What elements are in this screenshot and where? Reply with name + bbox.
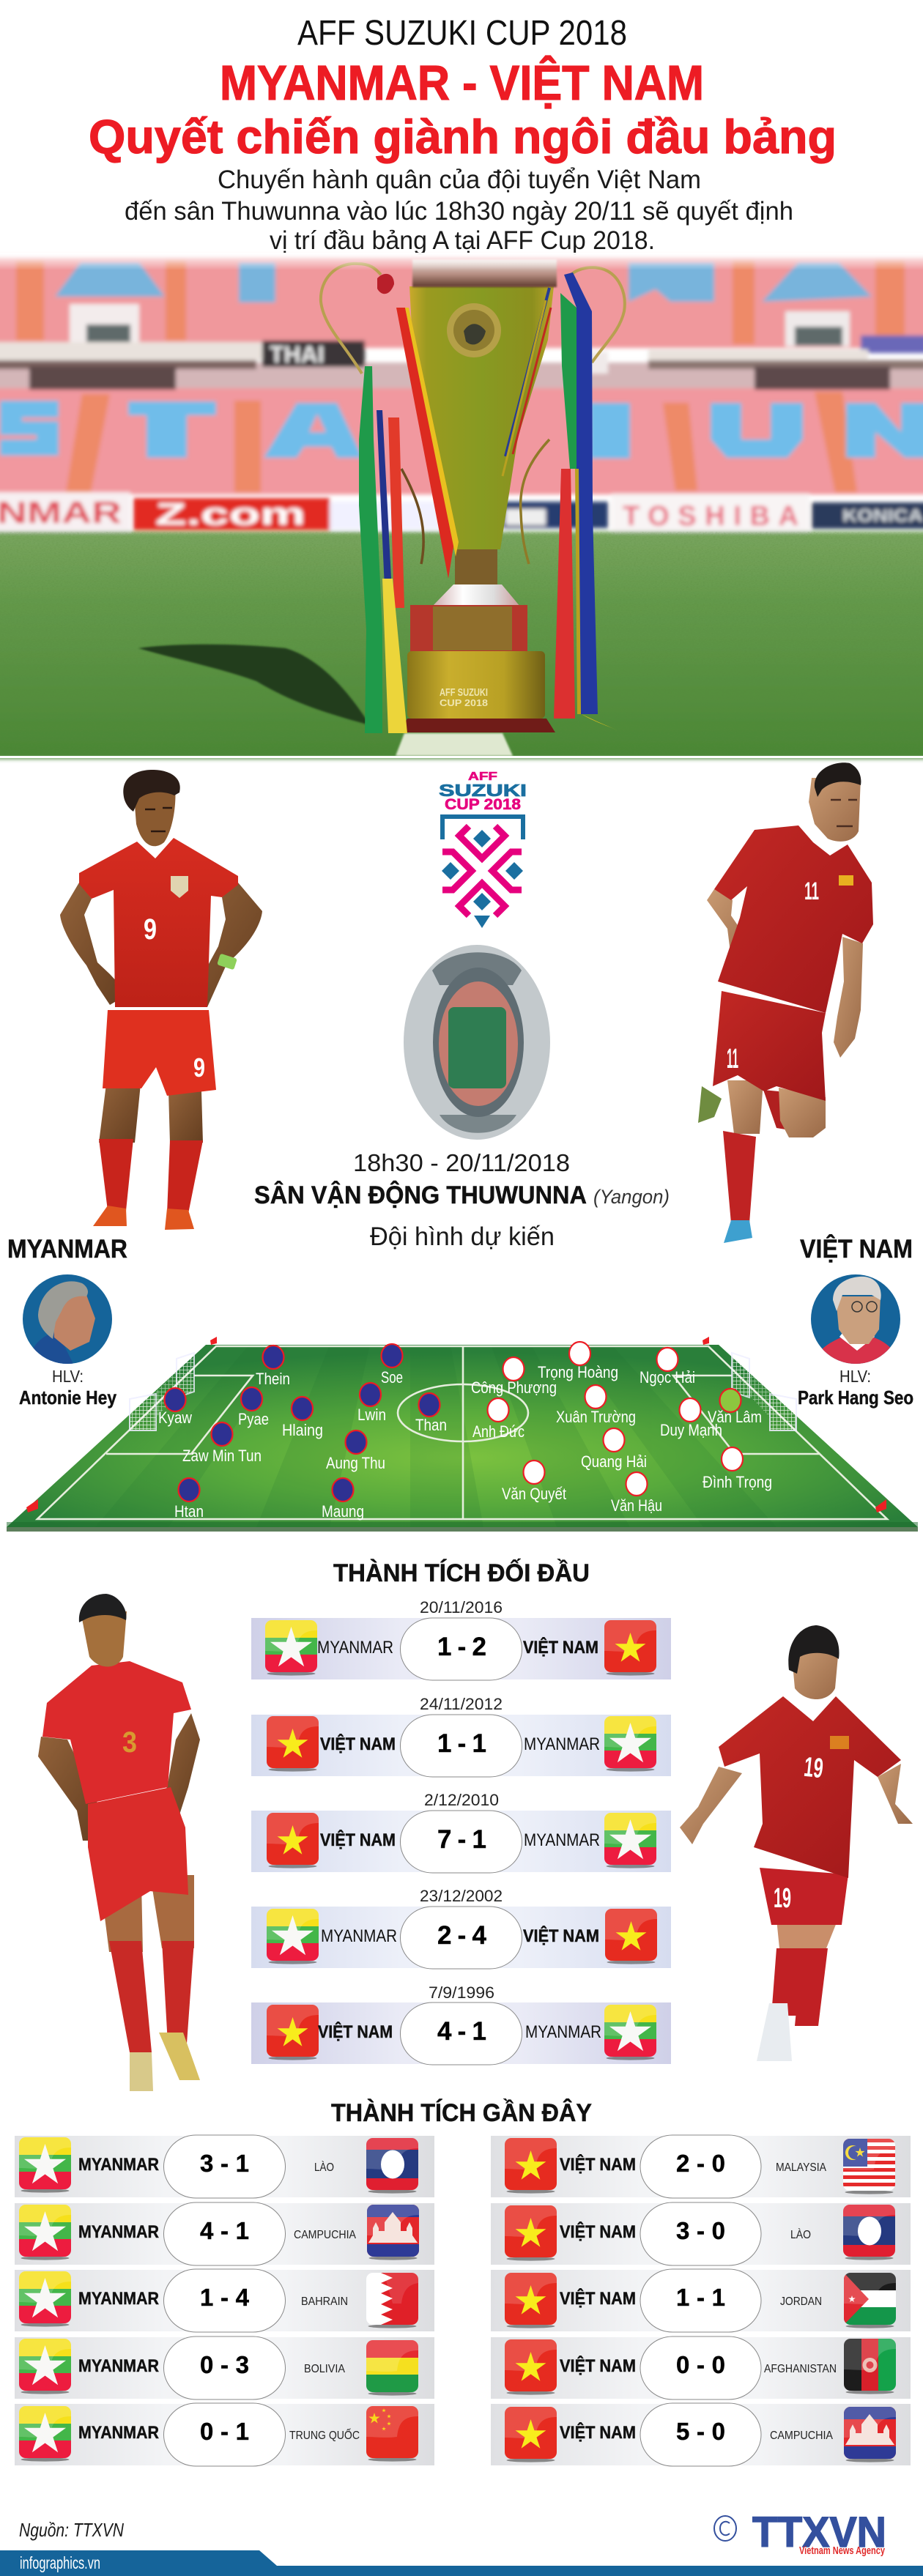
trophy shadow on grass: [138, 645, 370, 725]
recent: Myanmar 4-1 Cambodia: MYANMAR: [78, 2222, 159, 2242]
player: Vietnam number 19: [680, 1625, 913, 2061]
player: Vietnam number 19: 19: [802, 1752, 825, 1784]
recent: Myanmar 0-1 China: [15, 2403, 434, 2466]
stadium stands background: TOSHIBA: [623, 501, 798, 532]
recent: Vietnam 5-0 Cambodia: 5 - 0: [676, 2418, 725, 2445]
AFF Suzuki Cup 2018 logo: CUP 2018: [445, 796, 521, 813]
date: 7/9/1996: [429, 1983, 494, 2002]
recent: Vietnam 5-0 Cambodia: [491, 2403, 911, 2466]
match row: 7/9/1996 Vietnam 4-1 Myanmar: 4 - 1: [437, 2017, 486, 2046]
player: Myanmar number 3: [38, 1594, 200, 2091]
Vietnam players: Trọng Hoàng: [538, 1363, 618, 1381]
title: headline: Quyết chiến giành ngôi đầu bảng: [89, 110, 837, 163]
Myanmar players: Maung: [322, 1502, 364, 1521]
player: Vietnam number 11: 11: [804, 877, 819, 905]
Myanmar players: Zaw Min Tun: [182, 1447, 262, 1465]
Myanmar players: Kyaw: [158, 1408, 192, 1427]
section heading: recent results: THÀNH TÍCH GẦN ĐÂY: [331, 2099, 592, 2127]
recent: Myanmar 3-1 Laos: LÀO: [314, 2160, 334, 2174]
recent: Vietnam 1-1 Jordan: VIỆT NAM: [560, 2288, 636, 2309]
date: 2/12/2010: [424, 1791, 499, 1809]
title: match: MYANMAR - VIỆT NAM: [220, 56, 704, 111]
player: Vietnam number 11: [698, 762, 873, 1243]
match row: 7/9/1996 Vietnam 4-1 Myanmar: [251, 1983, 671, 2065]
recent: Myanmar 0-1 China: MYANMAR: [78, 2423, 159, 2443]
pitch surface: [7, 1345, 918, 1532]
player: Vietnam number 19: 19: [774, 1883, 791, 1914]
recent: Vietnam 0-0 Afghanistan: VIỆT NAM: [560, 2356, 636, 2376]
Myanmar players: Soe: [381, 1368, 403, 1387]
recent: Vietnam 3-0 Laos: 3 - 0: [676, 2217, 725, 2244]
player: Myanmar number 9: 9: [193, 1053, 205, 1083]
match row: 20/11/2016 Myanmar 1-2 Vietnam: VIỆT NAM: [523, 1637, 598, 1658]
intro text block: đến sân Thuwunna vào lúc 18h30 ngày 20/11 sẽ quyết định: [125, 197, 793, 226]
recent: Myanmar 4-1 Cambodia: 4 - 1: [200, 2217, 249, 2244]
date: 20/11/2016: [420, 1598, 503, 1617]
copyright mark: [714, 2516, 736, 2541]
recent: Myanmar 4-1 Cambodia: [15, 2202, 434, 2265]
stadium stands background: KONICA: [842, 506, 923, 526]
match row: 2/12/2010 Vietnam 7-1 Myanmar: 7 - 1: [437, 1825, 486, 1854]
recent: Myanmar 1-4 Bahrain: 1 - 4: [200, 2284, 250, 2311]
Vietnam players: Văn Hậu: [611, 1496, 662, 1515]
TTXVN logo: Vietnam News Agency: [799, 2545, 885, 2557]
corner flags: [26, 1337, 886, 1512]
trophy cup: [399, 259, 557, 732]
stadium stands background: Z.com: [155, 497, 305, 531]
match row: 24/11/2012 Vietnam 1-1 Myanmar: MYANMAR: [524, 1734, 600, 1754]
Myanmar players: Lwin: [357, 1406, 386, 1424]
recent: Myanmar 3-1 Laos: MYANMAR: [78, 2155, 159, 2175]
match time: 18h30 - 20/11/2018: [353, 1149, 570, 1176]
Vietnam players: Xuân Trường: [556, 1408, 636, 1426]
stadium aerial view: [404, 945, 550, 1140]
recent: Vietnam 2-0 Malaysia: [491, 2135, 911, 2198]
match row: 23/12/2002 Myanmar 2-4 Vietnam: MYANMAR: [321, 1926, 397, 1946]
recent: Myanmar 0-3 Bolivia: MYANMAR: [78, 2356, 159, 2376]
trophy cup: AFF SUZUKI: [440, 686, 488, 699]
goal left: [130, 1353, 194, 1430]
match row: 7/9/1996 Vietnam 4-1 Myanmar: MYANMAR: [525, 2022, 601, 2042]
source note: Nguồn: TTXVN: [19, 2519, 124, 2541]
AFF Suzuki Cup 2018 logo: AFF: [468, 771, 497, 783]
match row: 24/11/2012 Vietnam 1-1 Myanmar: VIỆT NAM: [320, 1734, 396, 1754]
player: Myanmar number 3: 3: [122, 1726, 137, 1759]
Myanmar players: Aung Thu: [326, 1454, 385, 1472]
Myanmar players: Than: [415, 1416, 447, 1434]
recent: Vietnam 1-1 Jordan: 1 - 1: [676, 2284, 725, 2311]
recent: Vietnam 5-0 Cambodia: VIỆT NAM: [560, 2422, 636, 2443]
match row: 23/12/2002 Myanmar 2-4 Vietnam: [251, 1887, 671, 1969]
match row: 24/11/2012 Vietnam 1-1 Myanmar: 1 - 1: [437, 1729, 486, 1758]
Myanmar players: Thein: [256, 1370, 290, 1388]
match row: 7/9/1996 Vietnam 4-1 Myanmar: VIỆT NAM: [318, 2022, 393, 2042]
team name: Myanmar: MYANMAR: [7, 1235, 127, 1263]
footer bar: [0, 2550, 923, 2576]
AFF Suzuki Cup 2018 logo: [439, 771, 527, 928]
recent: Myanmar 0-3 Bolivia: [15, 2336, 434, 2399]
Vietnam players: Văn Quyết: [502, 1485, 566, 1503]
football pitch with lineups: [7, 1337, 918, 1532]
goal right: [732, 1353, 796, 1430]
recent: Myanmar 1-4 Bahrain: BAHRAIN: [301, 2295, 348, 2308]
coach name: Antonie Hey: Antonie Hey: [19, 1387, 116, 1408]
match row: 2/12/2010 Vietnam 7-1 Myanmar: MYANMAR: [524, 1830, 600, 1850]
stadium stands background: THAI: [270, 341, 325, 368]
ribbons right: [503, 272, 619, 731]
recent: Vietnam 5-0 Cambodia: CAMPUCHIA: [770, 2430, 833, 2442]
match row: 2/12/2010 Vietnam 7-1 Myanmar: [251, 1791, 671, 1873]
recent: Myanmar 0-3 Bolivia: BOLIVIA: [304, 2363, 345, 2375]
team name: Vietnam: VIỆT NAM: [800, 1234, 913, 1263]
Myanmar players: Htan: [174, 1502, 204, 1521]
Vietnam players: Đình Trọng: [703, 1473, 772, 1491]
recent: Myanmar 1-4 Bahrain: MYANMAR: [78, 2289, 159, 2309]
match row: 23/12/2002 Myanmar 2-4 Vietnam: VIỆT NAM: [523, 1926, 599, 1946]
match row: 24/11/2012 Vietnam 1-1 Myanmar: [251, 1695, 671, 1777]
stadium stands background: [0, 256, 923, 759]
recent: Vietnam 0-0 Afghanistan: [491, 2336, 911, 2399]
pitch white line: [396, 733, 513, 756]
Vietnam players: Duy Mạnh: [660, 1421, 722, 1439]
recent: Vietnam 1-1 Jordan: [491, 2269, 911, 2332]
stadium name: SÂN VẬN ĐỘNG THUWUNNA: [254, 1181, 587, 1209]
coach portrait: Park Hang Seo: [811, 1274, 900, 1364]
coach portrait: Antonie Hey: [23, 1274, 112, 1364]
intro text block: vị trí đầu bảng A tại AFF Cup 2018.: [270, 226, 655, 255]
Myanmar players: Hlaing: [282, 1421, 323, 1439]
Vietnam players: Văn Lâm: [708, 1408, 762, 1426]
recent: Myanmar 0-3 Bolivia: 0 - 3: [200, 2351, 249, 2378]
Myanmar players: Pyae: [238, 1410, 269, 1428]
ribbons left: [359, 274, 459, 733]
hero photo: stadium and trophy: [0, 253, 923, 759]
recent: Myanmar 4-1 Cambodia: CAMPUCHIA: [294, 2229, 356, 2241]
title: cup name: AFF SUZUKI CUP 2018: [297, 14, 627, 53]
recent: Vietnam 1-1 Jordan: JORDAN: [780, 2295, 822, 2308]
match row: 2/12/2010 Vietnam 7-1 Myanmar: VIỆT NAM: [320, 1830, 396, 1850]
match row: 20/11/2016 Myanmar 1-2 Vietnam: [251, 1598, 671, 1680]
recent: Myanmar 1-4 Bahrain: [15, 2269, 434, 2332]
coach label: HLV: HLV:: [839, 1367, 871, 1386]
date: 24/11/2012: [420, 1695, 503, 1713]
Vietnam players: Quang Hải: [581, 1452, 647, 1471]
recent: Vietnam 0-0 Afghanistan: AFGHANISTAN: [764, 2363, 837, 2375]
lineup heading: Đội hình dự kiến: [370, 1222, 555, 1251]
recent: Vietnam 2-0 Malaysia: 2 - 0: [676, 2150, 725, 2177]
photo top fade: [0, 253, 923, 270]
section heading: head to head: THÀNH TÍCH ĐỐI ĐẦU: [333, 1559, 590, 1587]
Vietnam players: Ngọc Hải: [640, 1368, 695, 1387]
recent: Vietnam 3-0 Laos: [491, 2202, 911, 2265]
recent: Vietnam 2-0 Malaysia: VIỆT NAM: [560, 2154, 636, 2175]
player: Myanmar number 9: 9: [144, 913, 157, 946]
match row: 20/11/2016 Myanmar 1-2 Vietnam: MYANMAR: [317, 1638, 393, 1658]
footer bar: infographics.vn: [20, 2553, 100, 2572]
recent: Myanmar 0-1 China: 0 - 1: [200, 2418, 249, 2445]
intro text block: [125, 166, 793, 255]
AFF Suzuki Cup 2018 logo: SUZUKI: [439, 781, 527, 800]
recent: Myanmar 0-1 China: TRUNG QUỐC: [289, 2427, 360, 2442]
TTXVN logo: TTXVN: [752, 2509, 886, 2556]
Myanmar players: [158, 1344, 447, 1521]
player: Vietnam number 11: 11: [727, 1044, 738, 1074]
Vietnam players: Công Phượng: [471, 1378, 557, 1397]
recent: Vietnam 3-0 Laos: LÀO: [790, 2227, 811, 2241]
pitch lines: [37, 1346, 887, 1519]
stadium city: (Yangon): [593, 1186, 670, 1208]
coach label: HLV: HLV:: [52, 1367, 84, 1386]
intro text block: Chuyến hành quân của đội tuyển Việt Nam: [218, 166, 701, 194]
player: Myanmar number 9: [60, 770, 262, 1230]
trophy cup: CUP 2018: [440, 697, 488, 708]
recent: Vietnam 3-0 Laos: VIỆT NAM: [560, 2221, 636, 2242]
Vietnam players: Anh Đức: [472, 1422, 524, 1441]
recent: Myanmar 3-1 Laos: [15, 2135, 434, 2198]
match row: 20/11/2016 Myanmar 1-2 Vietnam: 1 - 2: [437, 1633, 486, 1661]
recent: Myanmar 3-1 Laos: 3 - 1: [200, 2150, 249, 2177]
recent: Vietnam 2-0 Malaysia: MALAYSIA: [776, 2161, 826, 2174]
Vietnam players: [471, 1342, 772, 1515]
recent: Vietnam 0-0 Afghanistan: 0 - 0: [676, 2351, 725, 2378]
date: 23/12/2002: [420, 1887, 503, 1905]
match row: 23/12/2002 Myanmar 2-4 Vietnam: 2 - 4: [437, 1921, 487, 1950]
trophy handles: [321, 264, 625, 564]
